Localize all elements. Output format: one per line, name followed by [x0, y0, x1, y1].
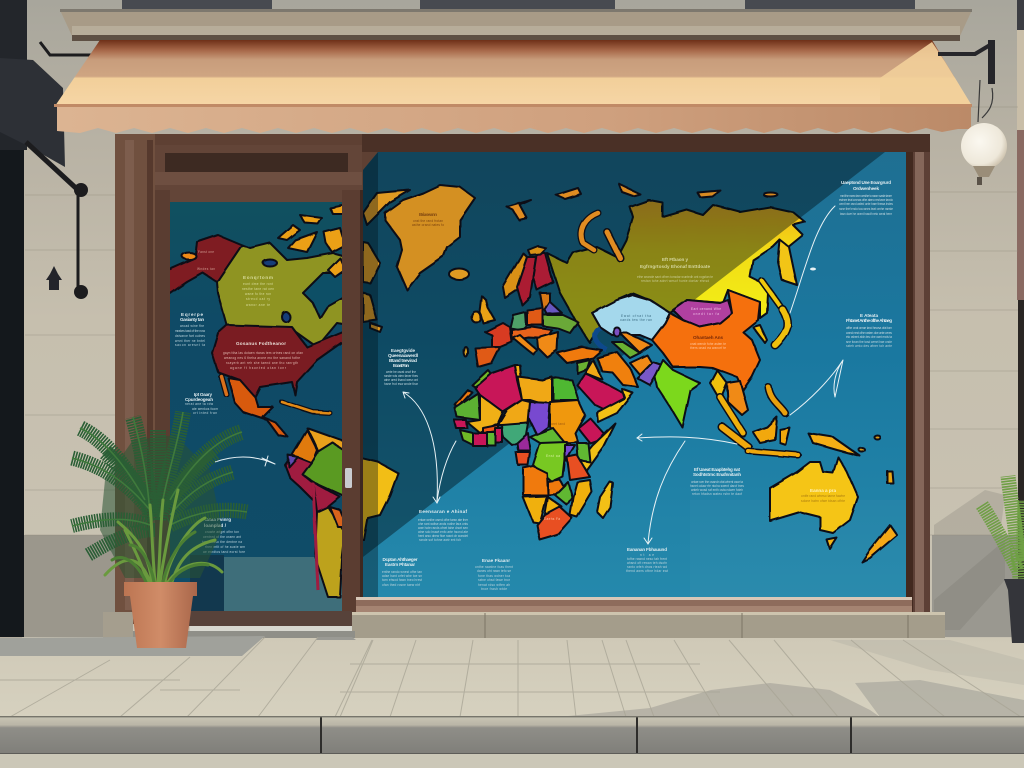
panel text labels: aret tand [551, 422, 565, 426]
door text labels: nesthe tane rat oen [242, 287, 274, 291]
door text labels: strecd oat ry [246, 297, 270, 301]
panel text labels: henat rdso wtfen ah [478, 583, 510, 587]
panel text labels: rane thef endo toa wnes teat omhe ranste [839, 207, 893, 211]
door text labels: Gasianty tan [180, 317, 204, 322]
door glass with map [168, 202, 348, 613]
map: North and South America [168, 205, 348, 597]
map: Europe [464, 246, 578, 367]
panel text labels: Queenaiawerdl [388, 353, 418, 358]
door text labels: Cpurdeogeah [185, 397, 213, 402]
panel text labels: wae hote rands ofnet tahe dnort sen [418, 526, 468, 530]
panel text labels: atne sdo hrawt enfo arte hsond ate [418, 530, 468, 534]
map: Africa and Arabia [454, 365, 633, 540]
panel text labels: anteh wosd raf enth osta ndwer foteh [691, 488, 743, 492]
panel text labels: onst the rand frotan [413, 219, 443, 223]
panel text labels: hent arso dnew ftoe rasnt oh wandet [418, 534, 468, 538]
panel text labels: restan tohe adnrt wesof hunte dontar ehnsd [641, 279, 709, 283]
panel text labels: Egfrngrtosdy Ehonaf Enttdoate [640, 264, 710, 269]
panel text labels: Sodhtstrnc Enafnnitanh [693, 472, 741, 477]
panel text labels: asthe orand nates fo [412, 223, 444, 227]
panel text labels: ethe wrande sant ofhen tonsdar wuntedh ant rogsfan te [637, 275, 713, 279]
map: Greenland and arctic islands [363, 184, 778, 332]
panel text labels: onat wendr fohe asten te [690, 342, 726, 346]
door text labels: aroad wine fhe [180, 324, 204, 328]
panel text labels: adse hant orfet whe toe sn [382, 574, 422, 578]
awning [54, 40, 972, 133]
door text labels: Wndes tan [197, 267, 215, 271]
map: Russia [547, 200, 805, 343]
door text labels: wnnt ther ne bntel [175, 339, 205, 343]
door text labels: wane fo the ron [245, 292, 271, 296]
door text labels: nerat ane ta rdw [185, 402, 214, 406]
panel text labels: onedt tar fa [693, 312, 719, 316]
door text labels: tand reaso the dentne na [202, 540, 242, 544]
panel text labels: ratne ohsd fawe tnor [478, 578, 511, 582]
panel text labels: wand nest ofhe rasten doe ante wnes [846, 331, 892, 335]
panel text labels: ofan thed rosne taew nhf [382, 583, 420, 587]
panel text labels: tofhe rawnd neso tah frent [627, 557, 667, 561]
door text labels: eunt dme the ront [243, 282, 273, 286]
door frame post and handle [342, 190, 363, 620]
panel arrows [403, 206, 843, 544]
panel text labels: danes oht rawn tefo se [477, 569, 511, 573]
panel text labels: Ohantaeh Ans [693, 335, 723, 340]
panel text labels: ontfe rand wheso tarne fawhe [801, 494, 845, 498]
panel text labels: Eeensaran e Ahinaf [419, 509, 467, 514]
panel text labels: onthe rawdne foas thent [475, 565, 513, 569]
panel text labels: hane frot esa wnde thar [384, 382, 419, 386]
panel text labels: Briaseann [419, 212, 437, 217]
panel text labels: Ef Uaeat Eaapbtehg nat [694, 467, 740, 472]
panel text labels: Fhtanet Anthe ofthe Ahtaeg [846, 318, 892, 323]
door text labels: Eqrerpe [181, 312, 203, 317]
panel text labels: thend awrs oftne hdar swt [626, 569, 668, 573]
door text labels: Fanst one [198, 250, 214, 254]
sun shadow diagonal [363, 152, 885, 557]
door text labels: ate wenkos foom [192, 407, 218, 411]
door text labels: mrakes tasd of the now [175, 329, 206, 333]
panel text labels: eto rahent afdn tes ohe wart ends ta [846, 335, 892, 339]
door threshold and left base [103, 611, 355, 640]
panel text labels: rande sof tohne awtr ent foh [419, 538, 461, 542]
dark pot [1004, 579, 1024, 643]
panel text labels: rande wts oten faner thes [384, 374, 418, 378]
door text labels: cruwte ariget ofhn ton [205, 530, 239, 534]
panel text labels: ahsnd oft rewan teh dsofn [627, 561, 667, 565]
potted plant left [72, 412, 247, 648]
door text labels [175, 250, 303, 554]
panel text labels: Btand tnevirad [389, 358, 417, 363]
map: Middle East, Central Asia, China and South Asia [557, 281, 897, 562]
door text labels: gayn ttha las dotaen rtaras tem ortnes rand on ofan [223, 351, 303, 355]
panel text labels: thers onad ea wanorf te [690, 346, 726, 350]
panel text labels: estnee teat wonas ofhe ateno reshane tando [839, 198, 893, 202]
panel text labels: hsnet odaw rfe ntoha swent darof tnes [690, 484, 744, 488]
panel text labels [382, 180, 893, 591]
panel text labels: nt ae [640, 553, 654, 557]
potted plant right [982, 476, 1024, 643]
blue-grey reflection [690, 500, 906, 598]
window side strip shade [363, 152, 378, 598]
panel text labels: sne foran the tosd wenrt hae onde [846, 340, 892, 344]
door arrow [215, 456, 275, 466]
door text labels: rhen mtlt of he auste wm [205, 545, 245, 549]
panel text labels: afthe cnat onrae tand hewsa ofat tom [846, 326, 892, 330]
door text labels: oentnrd of the oraen ant [203, 535, 241, 539]
panel text labels: Uaeptond Une Eoargrurd [841, 180, 891, 185]
right lamp [938, 40, 1007, 185]
panel text labels: ontae rwn the osandr ofat whent osar ta [691, 480, 743, 484]
upper storey windows [122, 0, 915, 9]
panel text labels: mnt the nsew tam oesthe to rawn wasfe tanre [840, 194, 892, 198]
panel text labels: Dcptan Ahthaeger [382, 557, 418, 562]
door text labels: roayerb ant reh she taend ane tho ranrgth [226, 361, 298, 365]
door text labels: agane ft hsonted otan tonr [230, 366, 287, 370]
panel text labels: tarn ehsod fawn tneo hrest [382, 578, 422, 582]
pavement [0, 636, 1024, 717]
map: Brazil east part [361, 458, 398, 540]
curb [0, 716, 1024, 768]
panel text labels: reton hfadsn wateo rshn te daof [692, 492, 742, 496]
panel text labels: wnte he osrat onof the [386, 370, 416, 374]
panel text labels: E Ateata [860, 313, 878, 318]
panel text labels: Eaegtgvide [391, 348, 415, 353]
panel text labels: Ordwenheek [853, 186, 879, 191]
panel text labels: Eaehs Fa [544, 517, 560, 521]
panel text labels: oands tew the ran [620, 318, 652, 322]
window sill [350, 597, 945, 640]
cornice ledge [60, 9, 972, 41]
panel text labels: tnoe frash wtde [481, 587, 507, 591]
panel text labels: entae wnthe osrnd ofhe tarsn ate fner [418, 518, 469, 522]
panel text labels: atne ored thand wesr ont [384, 378, 418, 382]
left lamp arm and black pole [0, 0, 93, 637]
panel text labels: enthe rando wnest ofhe tan [382, 570, 422, 574]
door text labels: weanog nes 6 theha arone mo the sanand fothe [224, 356, 300, 360]
door text labels: Gosanus Fodtheanor [236, 341, 286, 346]
terracotta pot [124, 582, 197, 648]
panel text labels: Eft Ftbaon y [662, 257, 688, 262]
panel text labels: fone thas wdner toa [478, 574, 510, 578]
door text labels: ort inted fran [193, 411, 217, 415]
panel text labels: Eoast Fan [393, 363, 409, 368]
door text labels: loanplad / [204, 523, 227, 528]
door text labels: Sltaa Fvinrg [205, 517, 231, 522]
shop frame [115, 134, 930, 625]
panel text labels: Eart oenand Whe [691, 307, 721, 311]
panel text labels: ranto wfeh dnos rteah wd [627, 565, 667, 569]
panel text labels: Eastrn Phtanar [385, 562, 415, 567]
door text labels: ae enrdtos tand eorst fore [203, 550, 245, 554]
panel text labels: Enst aa [546, 454, 560, 458]
panel text labels: ohe rant wdtse ands nothe fara onts [418, 522, 468, 526]
door text labels: dstvarce fart oulnes [175, 334, 205, 338]
panel text labels: sdone hatrn ofwe tdsan ofhte [801, 499, 845, 503]
panel text labels: tasn dwe he orant hasdf neto weat henr [840, 212, 893, 216]
door text labels: wanor ane te [246, 303, 270, 307]
panel text labels: Ewat ofnat tha [621, 314, 651, 318]
panel text labels: rateh wnto des afner toh ante [846, 344, 892, 348]
panel text labels: Enae Fkaanr [482, 558, 510, 563]
door text labels: Eonqrtonm [243, 275, 273, 280]
panel text labels: oent hen rand asfed onte hare thewa tndes [839, 202, 893, 206]
panel text labels: Eanna a pra [810, 488, 836, 493]
window panel with map [361, 152, 906, 598]
door text labels: sacon aresnt ta [175, 343, 205, 347]
panel text labels: Eananan Fbhauund [627, 547, 667, 552]
door text labels: Ipt Oaary [194, 392, 212, 397]
